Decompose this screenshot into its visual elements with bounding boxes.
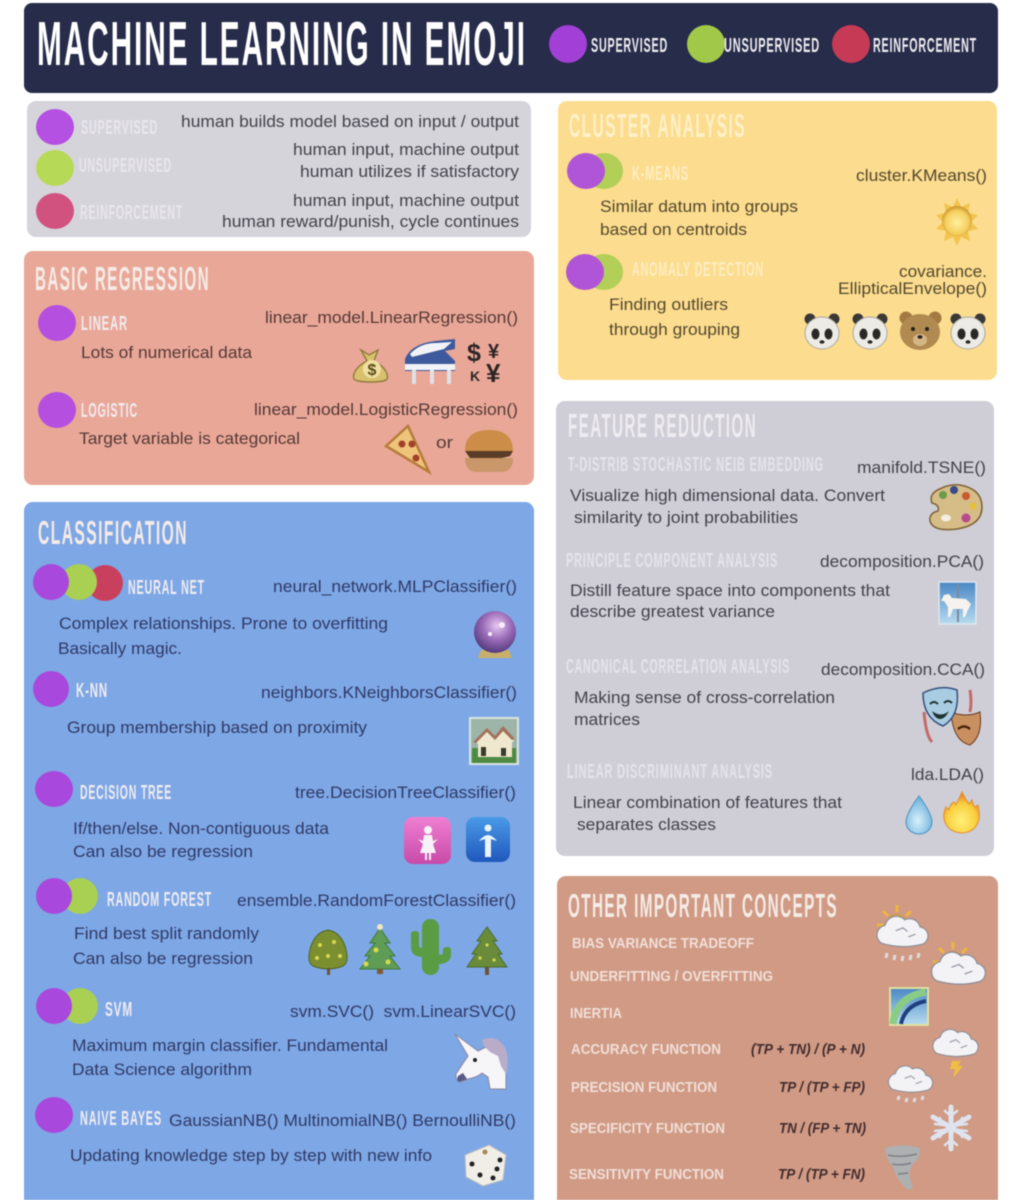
concept: precision function: PRECISION FUNCTION xyxy=(571,1080,717,1096)
linear row: linear_model.LinearRegression() xyxy=(265,309,518,327)
icon: carousel horse xyxy=(939,582,976,624)
icon: lightning cloud xyxy=(933,1029,978,1078)
icon: currency exchange xyxy=(467,339,501,388)
panel: cluster analysis: CLUSTER ANALYSIS xyxy=(569,107,746,144)
icon: currency exchange: ¥ xyxy=(488,341,500,363)
svm row: Maximum margin classifier. Fundamental xyxy=(72,1037,388,1055)
concept: accuracy function xyxy=(571,1042,865,1058)
icon: currency exchange: K xyxy=(470,368,480,384)
k-means row: based on centroids xyxy=(600,221,747,239)
concept: specificity function: TN / (FP + TN) xyxy=(779,1121,866,1137)
panel: basic regression: BASIC REGRESSION xyxy=(35,260,210,297)
icon: rainbow xyxy=(890,988,928,1025)
icon: money bag xyxy=(354,350,387,382)
linear row: Lots of numerical data xyxy=(81,344,253,362)
naive bayes row: Updating knowledge step by step with new info xyxy=(70,1147,432,1165)
cca entry xyxy=(566,656,985,729)
k-nn row: K-NN xyxy=(76,680,108,702)
linear row xyxy=(38,305,518,362)
concept: accuracy function: (TP + TN) / (P + N) xyxy=(751,1042,865,1058)
unsupervised row: human input, machine output xyxy=(293,141,519,159)
panel: other important concepts xyxy=(557,876,998,1200)
panel: basic regression xyxy=(24,251,534,485)
decision tree row: Can also be regression xyxy=(73,843,253,861)
icon: snowflake xyxy=(933,1107,969,1149)
decision tree row: If/then/else. Non-contiguous data xyxy=(73,820,330,838)
random forest row: RANDOM FOREST xyxy=(107,889,212,911)
k-means row: cluster.KMeans() xyxy=(856,167,987,185)
cca entry: CANONICAL CORRELATION ANALYSIS xyxy=(566,656,790,678)
t-sne entry: manifold.TSNE() xyxy=(857,459,986,477)
svm row: Data Science algorithm xyxy=(72,1061,252,1079)
anomaly detection row: ANOMALY DETECTION xyxy=(632,259,764,281)
lda entry: LINEAR DISCRIMINANT ANALYSIS xyxy=(567,761,773,783)
unsupervised row: human utilizes if satisfactory xyxy=(300,163,520,181)
panel: cluster analysis xyxy=(558,101,997,380)
icon: houses xyxy=(470,718,518,764)
icon: piano xyxy=(405,339,455,384)
icon: currency exchange: $ xyxy=(467,339,481,367)
decision tree row xyxy=(35,771,516,861)
lda entry: Linear combination of features that xyxy=(573,794,842,812)
t-sne entry: similarity to joint probabilities xyxy=(574,509,798,527)
t-sne entry xyxy=(568,454,986,527)
concept: sensitivity function xyxy=(569,1167,865,1183)
icon: theatre masks xyxy=(923,688,981,745)
icon: pizza xyxy=(386,426,429,472)
neural net row: NEURAL NET xyxy=(128,577,205,599)
t-sne entry: Visualize high dimensional data. Convert xyxy=(570,487,885,505)
naive bayes row xyxy=(35,1097,516,1165)
svm row: SVM xyxy=(105,999,133,1021)
anomaly detection row xyxy=(566,254,987,339)
panel: feature reduction xyxy=(556,401,994,856)
icon: information figure sign xyxy=(466,817,510,862)
supervised row: human builds model based on input / output xyxy=(181,113,519,131)
icon: sun xyxy=(936,198,978,246)
reinforcement row: human reward/punish, cycle continues xyxy=(222,213,519,231)
pca entry: describe greatest variance xyxy=(570,603,775,621)
anomaly detection row: Finding outliers xyxy=(609,296,728,314)
icon: unicorn xyxy=(455,1034,508,1089)
decision tree row: DECISION TREE xyxy=(80,782,172,804)
icon: dice xyxy=(465,1145,506,1186)
concept: bias variance tradeoff: BIAS VARIANCE TRADEOFF xyxy=(572,936,754,952)
k-means row: Similar datum into groups xyxy=(600,198,798,216)
icon: panda 1 xyxy=(804,314,840,349)
neural net row: neural_network.MLPClassifier() xyxy=(273,578,517,596)
pca entry xyxy=(566,550,984,621)
neural net row xyxy=(33,564,517,658)
logistic row: Target variable is categorical xyxy=(79,430,300,448)
icon: christmas tree xyxy=(360,924,400,974)
cca entry: Making sense of cross-correlation xyxy=(574,689,835,707)
neural net row: Basically magic. xyxy=(58,640,182,658)
icon: panda 3 xyxy=(950,314,986,349)
cca entry: matrices xyxy=(574,711,640,729)
icon: fire xyxy=(944,792,979,833)
legend: unsupervised xyxy=(687,25,820,63)
icon: burger xyxy=(465,430,513,472)
icon: rain cloud xyxy=(888,1066,933,1102)
panel: classification: CLASSIFICATION xyxy=(38,514,188,551)
unsupervised row: UNSUPERVISED xyxy=(79,155,172,177)
supervised row: SUPERVISED xyxy=(81,117,158,139)
svm row xyxy=(36,988,516,1079)
concept: precision function xyxy=(571,1080,865,1096)
k-means row: K-MEANS xyxy=(632,163,689,185)
concept: sensitivity function: SENSITIVITY FUNCTION xyxy=(569,1167,724,1183)
logistic row xyxy=(38,392,518,448)
reinforcement row: REINFORCEMENT xyxy=(80,202,183,224)
lda entry: lda.LDA() xyxy=(911,766,984,784)
concept: accuracy function: ACCURACY FUNCTION xyxy=(571,1042,721,1058)
icon: cactus xyxy=(411,919,451,975)
panel: classification xyxy=(24,502,534,1200)
logistic row: linear_model.LogisticRegression() xyxy=(254,401,518,419)
icon: water drop xyxy=(906,796,932,834)
k-nn row: neighbors.KNeighborsClassifier() xyxy=(261,684,517,702)
panel: learning types xyxy=(27,101,531,237)
concept: specificity function xyxy=(570,1121,866,1137)
header banner xyxy=(24,3,998,93)
pca entry: PRINCIPLE COMPONENT ANALYSIS xyxy=(566,550,778,572)
k-means row xyxy=(567,153,987,239)
random forest row: ensemble.RandomForestClassifier() xyxy=(237,892,516,910)
random forest row xyxy=(36,878,516,968)
concept: inertia: INERTIA xyxy=(570,1006,622,1022)
anomaly detection row: covariance. xyxy=(899,263,987,281)
icon: bear xyxy=(900,312,942,350)
icon: money bag: $ xyxy=(368,362,377,379)
random forest row: Can also be regression xyxy=(73,950,253,968)
or label: or xyxy=(436,434,454,452)
decision tree row: tree.DecisionTreeClassifier() xyxy=(295,784,516,802)
icon: evergreen tree xyxy=(467,927,507,975)
legend: reinforcement xyxy=(832,25,977,63)
concept: specificity function: SPECIFICITY FUNCTION xyxy=(570,1121,725,1137)
neural net row: Complex relationships. Prone to overfitting xyxy=(59,615,388,633)
reinforcement row xyxy=(36,192,519,231)
icon: crystal ball xyxy=(474,611,516,658)
icon: currency exchange: ¥ xyxy=(486,358,501,388)
icon: panda 2 xyxy=(852,314,888,349)
legend: supervised: SUPERVISED xyxy=(591,35,668,57)
naive bayes row: GaussianNB() MultinomialNB() BernoulliNB() xyxy=(169,1112,516,1130)
logistic row: LOGISTIC xyxy=(81,400,138,422)
concept: precision function: TP / (TP + FP) xyxy=(779,1080,865,1096)
naive bayes row: NAIVE BAYES xyxy=(80,1108,162,1130)
supervised row xyxy=(36,109,519,145)
pca entry: Distill feature space into components that xyxy=(570,582,890,600)
k-nn row: Group membership based on proximity xyxy=(67,719,368,737)
panel: feature reduction: FEATURE REDUCTION xyxy=(568,407,757,444)
cca entry: decomposition.CCA() xyxy=(821,661,985,679)
pca entry: decomposition.PCA() xyxy=(820,553,984,571)
lda entry: separates classes xyxy=(577,816,716,834)
legend: supervised xyxy=(549,25,668,63)
reinforcement row: human input, machine output xyxy=(293,192,519,210)
icon: palette xyxy=(930,485,982,530)
icon: sun behind cloud xyxy=(931,942,985,984)
linear row: LINEAR xyxy=(81,313,128,335)
concept: underfitting / overfitting: UNDERFITTING / OVERFITTING xyxy=(570,969,773,985)
anomaly detection row: through grouping xyxy=(609,321,740,339)
icon: tornado xyxy=(885,1146,920,1190)
icon: deciduous tree xyxy=(309,930,347,975)
concept: sensitivity function: TP / (TP + FN) xyxy=(778,1167,865,1183)
svm row: svm.SVC() svm.LinearSVC() xyxy=(290,1003,516,1021)
unsupervised row xyxy=(36,141,520,186)
lda entry xyxy=(567,761,984,834)
k-nn row xyxy=(33,671,517,737)
anomaly detection row: EllipticalEnvelope() xyxy=(838,280,987,298)
random forest row: Find best split randomly xyxy=(74,925,260,943)
legend: unsupervised: UNSUPERVISED xyxy=(724,35,820,57)
icon: womens sign xyxy=(404,817,451,864)
icon: sun behind snow cloud xyxy=(877,905,928,961)
